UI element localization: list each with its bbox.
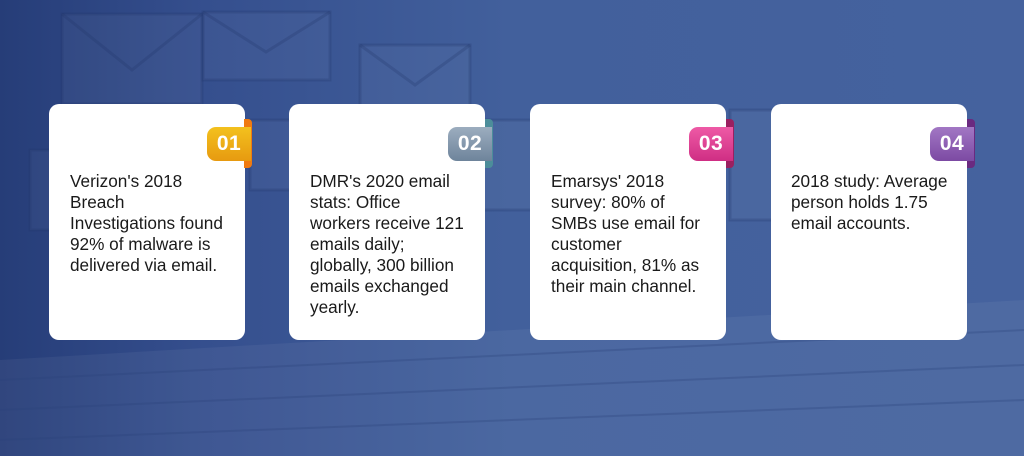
- text 3: SMBs use email for: [551, 213, 700, 233]
- text 4: email accounts.: [791, 213, 910, 233]
- card 4: [771, 104, 967, 340]
- text 2: emails exchanged: [310, 276, 449, 296]
- text 4: person holds 1.75: [791, 192, 928, 212]
- text 3: [551, 171, 700, 296]
- text: 03: [699, 132, 723, 155]
- text 1: Investigations found: [70, 213, 223, 233]
- badge 02: [448, 119, 493, 168]
- text 2: [310, 171, 464, 317]
- badge 04: [930, 119, 975, 168]
- text 2: stats: Office: [310, 192, 400, 212]
- text 1: Breach: [70, 192, 124, 212]
- text: 01: [217, 132, 241, 155]
- text 4: [791, 171, 947, 233]
- card 1: [49, 104, 245, 340]
- text 2: workers receive 121: [310, 213, 464, 233]
- text 2: DMR's 2020 email: [310, 171, 450, 191]
- card 2: [289, 104, 485, 340]
- text: 04: [940, 132, 964, 155]
- card 3: [530, 104, 726, 340]
- text 2: emails daily;: [310, 234, 405, 254]
- text 1: 92% of malware is: [70, 234, 210, 254]
- text 3: customer: [551, 234, 622, 254]
- badge 03: [689, 119, 734, 168]
- text 2: globally, 300 billion: [310, 255, 454, 275]
- text 1: delivered via email.: [70, 255, 217, 275]
- text: 02: [458, 132, 482, 155]
- text 3: survey: 80% of: [551, 192, 665, 212]
- text 3: their main channel.: [551, 276, 696, 296]
- text 4: 2018 study: Average: [791, 171, 947, 191]
- badge 01: [207, 119, 252, 168]
- text 1: [70, 171, 223, 275]
- text 3: acquisition, 81% as: [551, 255, 699, 275]
- text 2: yearly.: [310, 297, 359, 317]
- text 3: Emarsys' 2018: [551, 171, 664, 191]
- text 1: Verizon's 2018: [70, 171, 182, 191]
